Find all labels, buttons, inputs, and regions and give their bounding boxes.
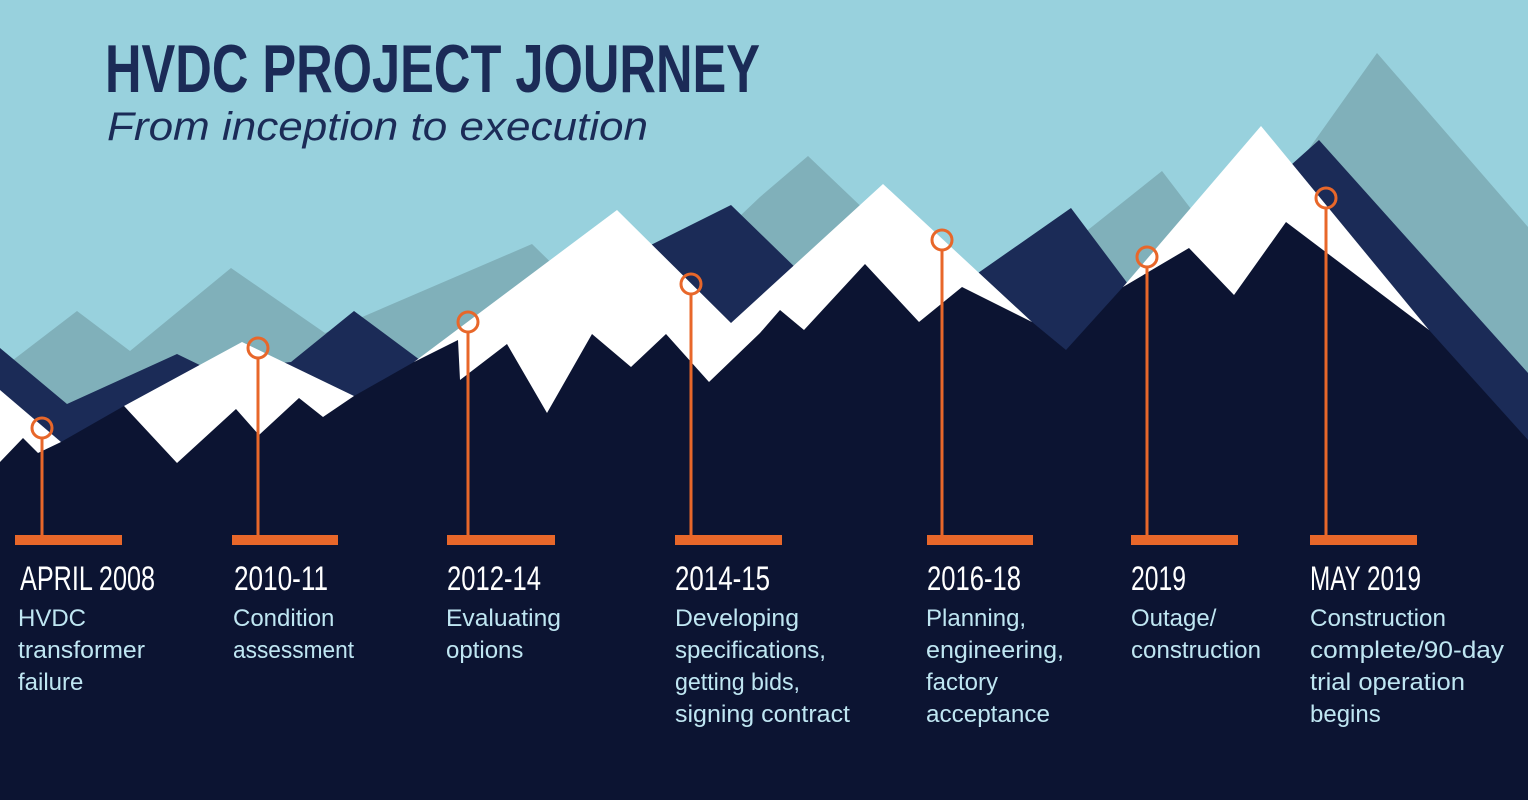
milestone 2: 2010-11: Condition	[233, 605, 334, 632]
title: HVDC PROJECT JOURNEY	[105, 31, 760, 107]
milestone 2: 2010-11: assessment	[233, 637, 354, 664]
milestone 1: April 2008: HVDC	[18, 605, 86, 632]
milestone 6: 2019	[1131, 247, 1261, 664]
milestone 2: 2010-11: 2010-11	[234, 560, 328, 598]
milestone 5: 2016-18	[926, 230, 1064, 728]
milestone 5: 2016-18: engineering,	[926, 637, 1064, 664]
milestone 6: 2019: construction	[1131, 637, 1261, 664]
milestone 5: 2016-18: 2016-18	[927, 560, 1021, 598]
mountains: snow caps	[0, 126, 1429, 470]
milestone 3: 2012-14: options	[446, 637, 523, 664]
milestone 4: 2014-15: Developing	[675, 605, 799, 632]
milestone 6: 2019: 2019	[1131, 560, 1186, 598]
milestone 3: 2012-14: Evaluating	[446, 605, 561, 632]
milestone 7: May 2019: MAY 2019	[1310, 560, 1421, 598]
milestone 5: 2016-18: acceptance	[926, 701, 1050, 728]
milestone 1: April 2008: failure	[18, 669, 83, 696]
milestone 4: 2014-15: 2014-15	[675, 560, 770, 598]
mountains: dark foreground	[0, 222, 1528, 800]
milestone 1: April 2008	[15, 418, 155, 696]
milestone 2: 2010-11	[232, 338, 354, 664]
milestone 4: 2014-15: signing contract	[675, 701, 850, 728]
milestone 1: April 2008: transformer	[18, 637, 145, 664]
milestone 5: 2016-18: factory	[926, 669, 998, 696]
subtitle: From inception to execution	[107, 105, 648, 149]
milestone 7: May 2019: Construction	[1310, 605, 1446, 632]
milestone 5: 2016-18: Planning,	[926, 605, 1026, 632]
milestone 7: May 2019: complete/90-day	[1310, 637, 1504, 664]
milestone 4: 2014-15	[675, 274, 850, 728]
milestone 7: May 2019	[1310, 188, 1504, 728]
milestone 7: May 2019: begins	[1310, 701, 1381, 728]
milestone 4: 2014-15: getting bids,	[675, 669, 800, 696]
milestone 7: May 2019: trial operation	[1310, 669, 1465, 696]
milestone 4: 2014-15: specifications,	[675, 637, 826, 664]
milestone 3: 2012-14	[446, 312, 561, 664]
milestone 1: April 2008: APRIL 2008	[20, 560, 155, 598]
milestone 3: 2012-14: 2012-14	[447, 560, 541, 598]
milestone 6: 2019: Outage/	[1131, 605, 1217, 632]
